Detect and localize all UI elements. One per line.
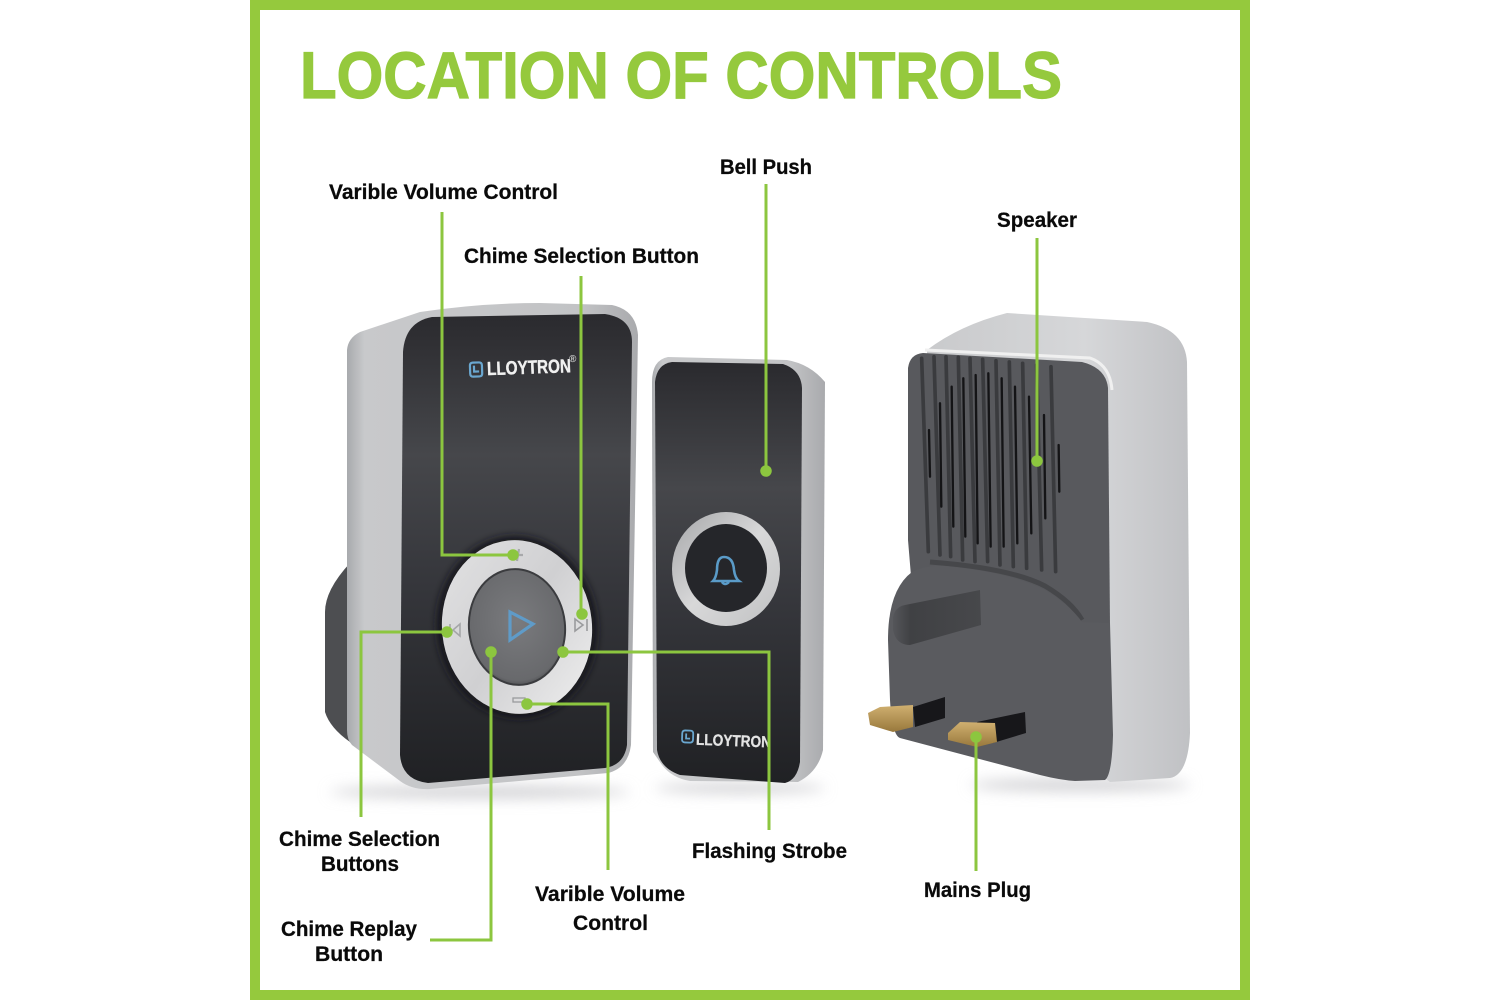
earth pin: [893, 590, 981, 645]
label: Bell Push: Bell Push: [720, 156, 812, 179]
bell push casing: [652, 357, 825, 782]
live pin sleeve: [913, 697, 945, 727]
icon: previous: [450, 624, 460, 636]
plug and speaker unit: [868, 313, 1190, 782]
logo mark: [682, 730, 693, 743]
play button: [463, 564, 571, 690]
soft ground shadows: [330, 779, 1190, 798]
chime unit casing: [347, 303, 638, 789]
logo wordmark: LLOYTRON: [487, 356, 571, 380]
plug base: [888, 566, 1113, 781]
leader: Varible Volume Control bottom: [522, 699, 608, 870]
label: Chime Replay Button: [281, 918, 417, 966]
bell push unit: [652, 357, 825, 783]
logo wordmark: LLOYTRON: [696, 732, 771, 751]
label: Speaker: Speaker: [997, 209, 1077, 232]
green page frame: [255, 5, 1245, 995]
plug shoulder edge: [930, 562, 1082, 620]
icon: next: [575, 619, 587, 631]
bell push black face: [655, 362, 802, 783]
ring halo: [428, 528, 606, 726]
label: Varible Volume Control bottom: Varible Volume: [535, 883, 685, 906]
bell button ring: [672, 512, 780, 626]
label: Varible Volume Control: Varible Volume Control: [329, 181, 558, 204]
title: LOCATION OF CONTROLS: [300, 38, 1062, 112]
label: Chime Selection Buttons: Chime Selection: [279, 828, 440, 851]
icon: play triangle: [510, 612, 533, 640]
neutral pin sleeve: [977, 712, 1026, 743]
label: Mains Plug: Mains Plug: [924, 879, 1031, 902]
neutral pin brass tip: [948, 722, 997, 747]
label: Chime Selection Button: Chime Selection Button: [464, 245, 699, 268]
icon: bell: [713, 557, 739, 584]
leader: Chime Selection Button: [577, 276, 587, 619]
chime unit: [325, 303, 638, 789]
leader: Speaker: [1032, 238, 1042, 466]
label: Varible Volume Control bottom: [535, 883, 685, 935]
leader: Chime Selection Buttons: [361, 627, 452, 817]
live pin brass tip: [868, 705, 913, 732]
leader: Bell Push: [761, 184, 771, 476]
leader: Mains Plug: [971, 732, 981, 871]
leader: Flashing Strobe: [558, 647, 769, 830]
logo mark: [470, 362, 482, 377]
label: Chime Replay Button: Button: [315, 943, 383, 966]
label: Chime Selection Buttons: Buttons: [321, 853, 399, 876]
white edge: [925, 350, 1112, 390]
control ring: [433, 533, 601, 721]
speaker grooves: [922, 357, 1059, 572]
bell button: [685, 524, 767, 612]
label: Varible Volume Control bottom: Control: [573, 912, 648, 935]
LLOYTRON logo on chime: [470, 356, 571, 381]
leader: Varible Volume Control top: [442, 212, 518, 560]
icon: plus: [513, 549, 523, 561]
LLOYTRON logo on bell push: [682, 730, 771, 751]
chime unit black face: [400, 314, 632, 783]
registered mark: ®: [569, 354, 577, 365]
plug unit dark rear panel: [908, 353, 1110, 640]
label: Chime Selection Buttons: [279, 828, 440, 876]
plug unit silver body: [927, 313, 1190, 782]
label: Chime Replay Button: Chime Replay: [281, 918, 417, 941]
icon: minus: [513, 698, 525, 702]
label: Flashing Strobe: Flashing Strobe: [692, 840, 847, 863]
leader: Chime Replay Button: [430, 647, 496, 940]
rear plug of chime unit: [325, 563, 350, 742]
